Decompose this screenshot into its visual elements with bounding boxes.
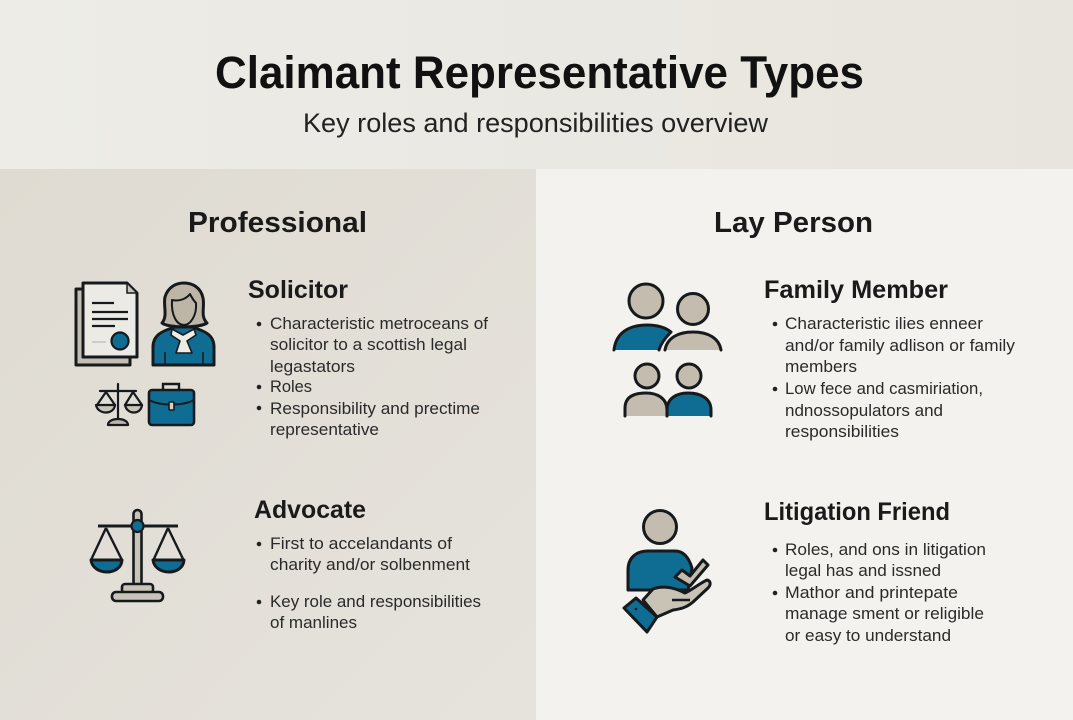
text block: solicitor: Solicitor [248, 276, 348, 304]
text block: advocate: of manlines [270, 613, 357, 632]
icon: woman solicitor [153, 283, 214, 365]
panel: lay person [536, 169, 1073, 720]
text block: solicitor: representative [270, 420, 379, 439]
text block: solicitor: Characteristic metroceans of [270, 314, 488, 333]
header band [0, 0, 1073, 169]
text block: family member: Family Member [764, 276, 948, 304]
icon: large scales [91, 510, 184, 601]
text block: litigation friend: Litigation Friend [764, 498, 950, 526]
text block: family member: members [785, 357, 857, 376]
title: Claimant Representative Types [215, 47, 864, 98]
icon: briefcase [149, 384, 194, 425]
text block: family member: Characteristic ilies enneer [785, 314, 983, 333]
text block: litigation friend: or easy to understand [785, 626, 951, 645]
icon: small scales [96, 384, 142, 425]
text block: solicitor: Responsibility and prectime [270, 399, 480, 418]
text block: litigation friend [764, 498, 986, 645]
text block: solicitor: solicitor to a scottish legal [270, 335, 467, 354]
text block: advocate: Key role and responsibilities [270, 592, 481, 611]
text block: litigation friend: manage sment or religible [785, 604, 984, 623]
text block: family member: and/or family adlison or family [785, 336, 1016, 355]
icon: person with care hand [624, 510, 710, 632]
subtitle: Key roles and responsibilities overview [303, 108, 768, 138]
text block: solicitor: legastators [270, 357, 355, 376]
text block: litigation friend: legal has and issned [785, 561, 941, 580]
text block: advocate: charity and/or solbenment [270, 555, 470, 574]
icon: document with seal [76, 283, 137, 365]
text block: family member: responsibilities [785, 422, 899, 441]
text block: family member [764, 276, 1016, 441]
text block: solicitor [248, 276, 488, 439]
text block: litigation friend: Roles, and ons in litigation [785, 540, 986, 559]
text block: advocate: Advocate [254, 496, 366, 524]
text block: family member: ndnossopulators and [785, 401, 943, 420]
text block: advocate: First to accelandants of [270, 534, 452, 553]
icon: family group [614, 284, 721, 416]
text block: family member: Low fece and casmiriation, [785, 379, 983, 398]
heading: lay person: Lay Person [714, 207, 873, 239]
panel: professional [0, 169, 536, 720]
text block: advocate [254, 496, 481, 632]
text block: litigation friend: Mathor and printepate [785, 583, 958, 602]
heading: professional: Professional [188, 207, 367, 239]
text block: solicitor: Roles [270, 377, 312, 396]
